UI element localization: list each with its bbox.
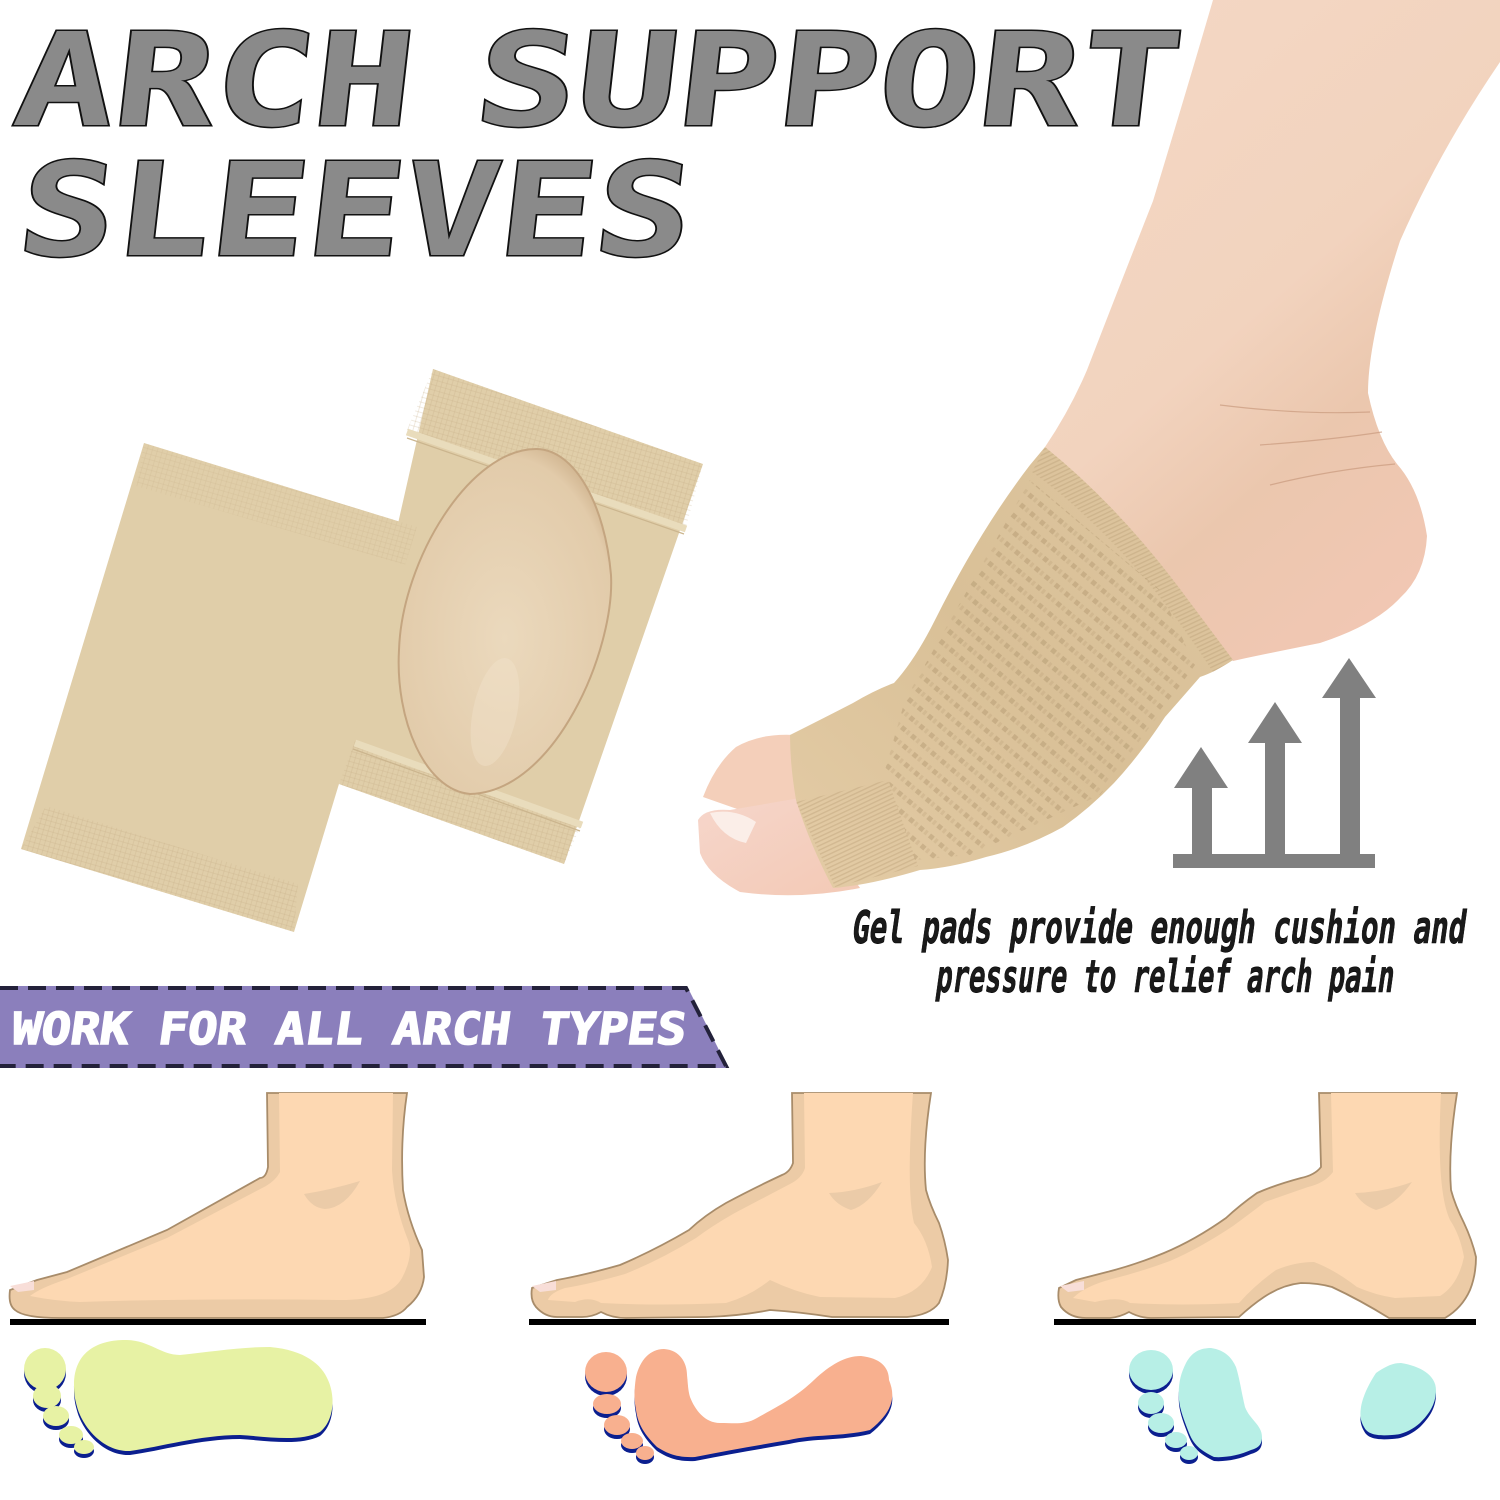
ground line bbox=[10, 1319, 426, 1325]
toes bbox=[703, 735, 835, 820]
product photo: pair of sleeves with gel pad bbox=[21, 369, 703, 932]
ankle creases bbox=[1220, 405, 1395, 485]
toenail bbox=[10, 1281, 34, 1292]
toenail bbox=[710, 812, 756, 843]
plain sleeve bbox=[21, 443, 417, 932]
foot diagram: high arch bbox=[1054, 1093, 1476, 1325]
foot diagram: normal arch bbox=[529, 1093, 949, 1325]
banner: work for all arch types: WORK FOR ALL ARCH TYPES bbox=[9, 1004, 690, 1055]
ankle bone bbox=[829, 1182, 882, 1210]
title: SUPPORT bbox=[468, 5, 1190, 156]
title: ARCH bbox=[7, 5, 423, 156]
footprint: flat arch bbox=[24, 1340, 333, 1458]
toenail bbox=[1060, 1281, 1084, 1292]
title bbox=[7, 5, 1190, 286]
banner: work for all arch types bbox=[0, 986, 728, 1068]
footprint: high arch bbox=[1129, 1348, 1436, 1464]
arrow: tall bbox=[1322, 658, 1376, 856]
leg and foot photo wearing sleeve bbox=[698, 0, 1500, 895]
caption: gel pads bbox=[849, 901, 1470, 1003]
rising arrows icon bbox=[1173, 658, 1376, 868]
arrow: medium bbox=[1248, 702, 1302, 856]
footprint: normal arch bbox=[585, 1349, 892, 1464]
arrow base bbox=[1173, 854, 1375, 868]
ankle bone bbox=[304, 1181, 360, 1209]
ankle bone bbox=[1355, 1182, 1412, 1210]
foot diagram: flat arch bbox=[10, 1093, 426, 1325]
sleeve with gel pad bbox=[339, 369, 703, 864]
ground line bbox=[529, 1319, 949, 1325]
title: SLEEVES bbox=[11, 135, 701, 286]
foot outline bbox=[10, 1093, 424, 1318]
arrow: short bbox=[1174, 747, 1228, 856]
toenail bbox=[532, 1281, 556, 1292]
gel pad bbox=[399, 449, 611, 794]
ground line bbox=[1054, 1319, 1476, 1325]
sleeve cuff band bbox=[1032, 447, 1233, 672]
mesh texture bbox=[885, 480, 1195, 860]
sleeve bbox=[790, 447, 1233, 888]
leg and heel bbox=[1045, 0, 1500, 661]
